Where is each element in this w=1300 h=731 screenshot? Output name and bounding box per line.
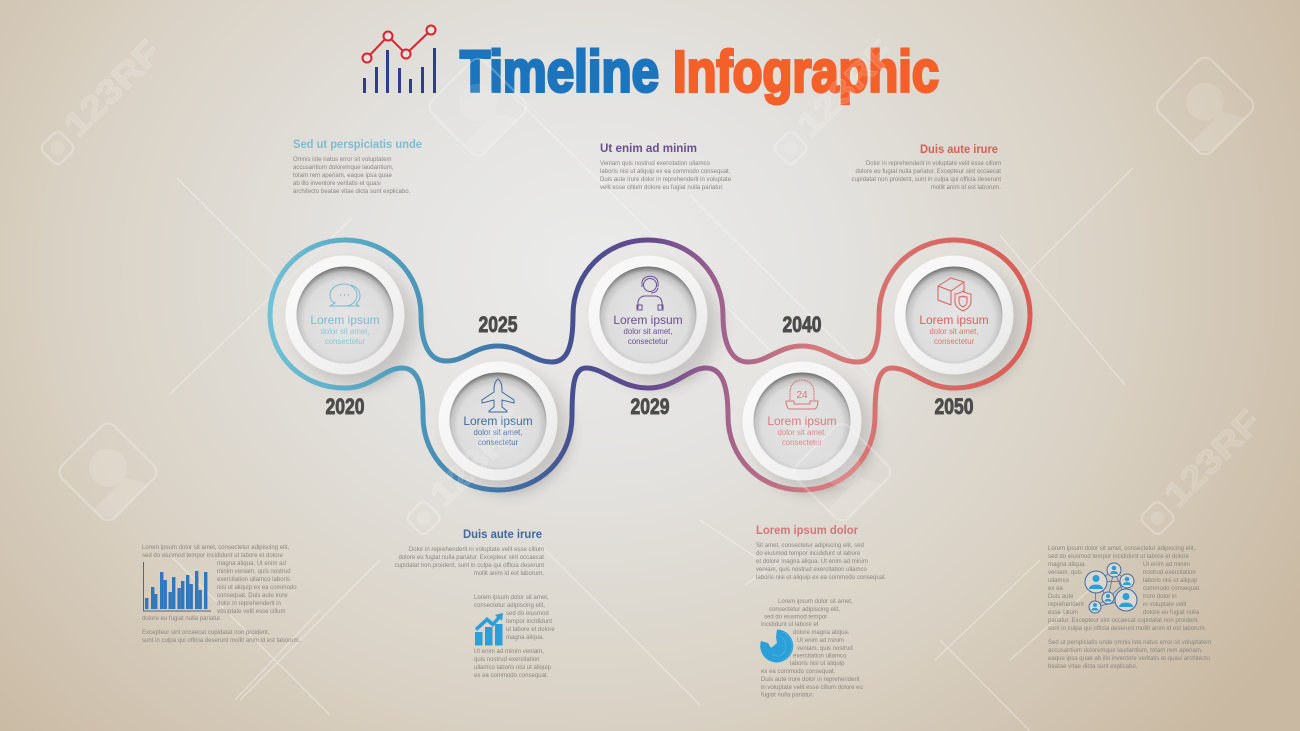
watermarks: 123RF xyxy=(790,33,902,145)
milestone 2025: dolor sit amet, xyxy=(474,428,522,437)
milestone 2025 xyxy=(438,362,558,480)
text block: bottom left: nisi ut aliquip ex ea commodo xyxy=(217,585,297,591)
text block: bottom left xyxy=(142,545,301,644)
text block: wrapped note: ex ea commodo consequat. xyxy=(761,669,836,675)
text block: bottom left: dolor in reprehenderit in xyxy=(217,601,281,607)
text block: bottom right: in voluptate velit xyxy=(1143,602,1187,608)
text block: growth note: quis nostrud exercitation xyxy=(474,657,540,663)
text block: Ut enim ad minim: velit esse cillum dolore eu fugiat nulla pariatur. xyxy=(600,185,724,191)
milestone 2040: consectetur xyxy=(782,438,823,447)
text block: bottom left: exercitation ullamco laboris xyxy=(217,577,290,583)
icon: airplane xyxy=(482,379,514,412)
milestone 2020: consectetur xyxy=(325,337,366,346)
icon: 24 hour phone xyxy=(786,380,818,409)
text block: bottom left: Lorem ipsum dolor sit amet, consectetur adipiscing elit, xyxy=(142,545,290,551)
milestone 2040: dolor sit amet, xyxy=(778,428,826,437)
text block: Ut enim ad minim: Veniam quis nostrud exercitation ullamco xyxy=(600,161,711,167)
milestone 2050: Lorem ipsum xyxy=(919,313,989,327)
milestone 2040: 24 xyxy=(796,390,808,401)
text block: Lorem ipsum dolor xyxy=(756,525,887,581)
text block: bottom left: sunt in culpa qui officia deserunt mollit anim id est laborum. xyxy=(142,638,301,644)
watermarks xyxy=(33,33,1269,539)
text block: bottom left: magna aliqua. Ut enim ad xyxy=(217,561,286,567)
text block: bottom right: sunt in culpa qui officia deserunt mollit anim id est laborum. xyxy=(1048,626,1207,632)
milestone 2029 xyxy=(588,256,708,374)
roadmap ribbon xyxy=(270,240,1030,490)
text block: Duis aute irure bottom: Dolor in reprehenderit in voluptate velit esse cillum xyxy=(409,547,544,553)
icon: bar chart xyxy=(144,562,211,611)
text block: Sed ut perspiciatis unde: Sed ut perspiciatis unde xyxy=(293,139,422,151)
text block: growth note: ut labore et dolore xyxy=(506,627,555,633)
text block: bottom right: nostrud exercitation xyxy=(1143,570,1196,576)
text block: growth note: ex ea commodo consequat. xyxy=(474,673,549,679)
background diagonal lines xyxy=(170,88,1133,731)
text block: growth note xyxy=(474,595,555,679)
milestone 2040: Lorem ipsum xyxy=(767,414,837,428)
text block: bottom right: accusantium doloremque laudantium, totam rem aperiam, xyxy=(1048,648,1203,654)
title icon: line and bar chart xyxy=(362,26,436,93)
text block: Sed ut perspiciatis unde: architecto beatae vitae dicta sunt explicabo. xyxy=(293,189,411,195)
text block: bottom right: veniam, quis xyxy=(1048,570,1082,576)
text block: Duis aute irure top: Duis aute irure xyxy=(920,144,998,156)
text block: wrapped note: Ut enim ad minim xyxy=(797,638,844,644)
text block: bottom right: Sed ut perspiciatis unde omnis iste natus error sit voluptatem xyxy=(1048,640,1211,646)
year labels: 2040 xyxy=(782,312,822,337)
text block: bottom right: esse cillum xyxy=(1048,610,1078,616)
text block: wrapped note: laboris nisi ut aliquip xyxy=(790,661,845,667)
milestone 2020: Lorem ipsum xyxy=(310,313,380,327)
milestone 2029: dolor sit amet, xyxy=(624,327,672,336)
text block: bottom right: irure dolor in xyxy=(1143,594,1177,600)
text block: growth note: consectetur adipiscing elit, xyxy=(474,603,545,609)
text block: bottom right: pariatur. Excepteur sint occaecat cupidatat non proident, xyxy=(1048,618,1199,624)
text block: wrapped note: exercitation ullamco xyxy=(793,654,847,660)
text block: Duis aute irure top: dolore eu fugiat nulla pariatur. Excepteur sint occaecat xyxy=(855,169,1001,175)
text block: bottom right: ullamco xyxy=(1048,578,1069,584)
text block: bottom left: dolore eu fugiat nulla pariatur. xyxy=(142,616,222,622)
milestone 2020 xyxy=(286,256,404,374)
text block: bottom right: dolore eu fugiat nulla xyxy=(1143,610,1200,616)
text block: wrapped note: Lorem ipsum dolor sit amet, xyxy=(778,599,853,605)
icon: box and shield xyxy=(938,278,971,311)
text block: Duis aute irure top: Dolor in reprehenderit in voluptate velit esse cillum xyxy=(866,161,1001,167)
title xyxy=(460,40,939,104)
text block: wrapped note: dolore magna aliqua. xyxy=(793,630,850,636)
text block: bottom left: minim veniam, quis nostrud xyxy=(217,569,291,575)
text block: growth note: magna aliqua. xyxy=(506,635,544,641)
watermarks: 123RF xyxy=(1157,403,1269,515)
text block: bottom right: Ut enim ad minim xyxy=(1143,562,1190,568)
text block: bottom right: beatae vitae dicta sunt explicabo. xyxy=(1048,664,1138,670)
text block: Ut enim ad minim: laboris nisi ut aliquip ex ea commodo consequat. xyxy=(600,169,731,175)
text block: bottom left: consequat. Duis aute irure xyxy=(217,593,288,599)
year labels: 2020 xyxy=(326,394,364,419)
text block: bottom right: Lorem ipsum dolor sit amet, consectetur adipiscing elit, xyxy=(1048,546,1196,552)
roadmap shadows xyxy=(295,265,1024,491)
milestone 2050 xyxy=(894,256,1014,374)
text block: bottom right: magna aliqua. xyxy=(1048,562,1086,568)
icon: growth chart xyxy=(475,613,503,646)
icon: radial donut chart xyxy=(760,630,793,662)
milestone 2050: consectetur xyxy=(934,337,975,346)
text block: wrapped note: fugiat nulla pariatur. xyxy=(761,692,814,698)
text block: Lorem ipsum dolor: do eiusmod tempor incididunt ut labore xyxy=(756,551,861,557)
text block: Lorem ipsum dolor: et dolore magna aliqua. Ut enim ad minim xyxy=(756,559,868,565)
text block: Sed ut perspiciatis unde xyxy=(293,139,422,195)
milestone 2050: dolor sit amet, xyxy=(930,327,978,336)
text block: bottom right: reprehenderit xyxy=(1048,602,1084,608)
text block: bottom right: Duis aute xyxy=(1048,594,1074,600)
text block: Lorem ipsum dolor: laboris nisi ut aliquip ex ea commodo consequat. xyxy=(756,575,887,581)
text block: Sed ut perspiciatis unde: totam rem aperiam, eaque ipsa quae xyxy=(293,173,392,179)
text block: Sed ut perspiciatis unde: Omnis iste natus error sit voluptatem xyxy=(293,157,391,163)
text block: Lorem ipsum dolor: Lorem ipsum dolor xyxy=(756,525,859,537)
milestone 2020: dolor sit amet, xyxy=(321,327,369,336)
year labels: 2025 xyxy=(478,312,518,337)
title: Timeline xyxy=(460,40,659,104)
text block: wrapped note: veniam, quis nostrud xyxy=(797,646,853,652)
milestone 2040 xyxy=(742,362,862,480)
text block: growth note: tempor incididunt xyxy=(506,619,552,625)
icon: chat bubbles xyxy=(330,284,360,306)
text block: Duis aute irure bottom: Duis aute irure xyxy=(463,529,542,541)
text block: Duis aute irure bottom: mollit anim id est laborum. xyxy=(474,571,544,577)
text block: growth note: sed do eiusmod xyxy=(506,611,549,617)
text block: wrapped note: incididunt ut labore et xyxy=(761,622,819,628)
text block: wrapped note xyxy=(761,599,863,698)
text block: wrapped note: in voluptate velit esse cillum dolore eu xyxy=(761,685,863,691)
text block: bottom right: commodo consequat. xyxy=(1143,586,1201,592)
text block: bottom right xyxy=(1048,546,1211,670)
text block: bottom left: Excepteur sint occaecat cupidatat non proident, xyxy=(142,630,270,636)
text block: Duis aute irure bottom: dolore eu fugiat nulla pariatur. Excepteur sint occaecat xyxy=(398,555,544,561)
text block: Duis aute irure bottom: cupidatat non proident, sunt in culpa qui officia deserunt xyxy=(395,563,544,569)
watermarks: 123RF xyxy=(423,403,535,515)
text block: bottom right: laboris nisi ut aliquip xyxy=(1143,578,1198,584)
watermarks: 123RF xyxy=(57,33,169,145)
text block: wrapped note: sed do eiusmod tempor xyxy=(764,614,827,620)
text block: Ut enim ad minim xyxy=(600,143,732,191)
text block: Lorem ipsum dolor: veniam, quis nostrud exercitation ullamco xyxy=(756,567,868,573)
text block: Ut enim ad minim: Ut enim ad minim xyxy=(600,143,697,155)
text block: bottom right: sed do eiusmod tempor incididunt ut labore et dolore xyxy=(1048,554,1189,560)
milestone 2025: consectetur xyxy=(478,438,519,447)
text block: bottom right: eaque ipsa quae ab illo inventore veritatis et quasi architecto xyxy=(1048,656,1211,662)
text block: Duis aute irure top: cupidatat non proident, sunt in culpa qui officia deserunt xyxy=(852,177,1001,183)
text block: Duis aute irure top: mollit anim id est laborum. xyxy=(931,185,1001,191)
text block: growth note: Ut enim ad minim veniam, xyxy=(474,649,544,655)
text block: Sed ut perspiciatis unde: ab illo inventore veritatis et quasi xyxy=(293,181,381,187)
text block: bottom right: ex ea xyxy=(1048,586,1063,592)
milestone 2029: Lorem ipsum xyxy=(613,313,683,327)
title: Infographic xyxy=(673,40,939,104)
text block: growth note: Lorem ipsum dolor sit amet, xyxy=(474,595,549,601)
year labels: 2029 xyxy=(630,394,670,419)
year labels: 2050 xyxy=(934,394,974,419)
text block: Duis aute irure top xyxy=(852,144,1001,191)
milestone 2029: consectetur xyxy=(628,337,669,346)
text block: growth note: ullamco laboris nisi ut aliquip xyxy=(474,665,552,671)
text block: bottom left: voluptate velit esse cillum xyxy=(217,609,286,615)
text block: bottom left: sed do eiusmod tempor incididunt ut labore et dolore xyxy=(142,553,283,559)
milestone 2025: Lorem ipsum xyxy=(463,414,533,428)
icon: people network xyxy=(1085,563,1137,613)
text block: wrapped note: consectetur adipiscing elit, xyxy=(769,607,840,613)
text block: Duis aute irure bottom xyxy=(395,529,544,577)
text block: Ut enim ad minim: Duis aute irure dolor in reprehenderit in voluptate xyxy=(600,177,732,183)
text block: Lorem ipsum dolor: Sit amet, consectetur adipiscing elit, sed xyxy=(756,543,864,549)
text block: Sed ut perspiciatis unde: accusantium doloremque laudantium, xyxy=(293,165,394,171)
year labels xyxy=(326,312,974,419)
text block: wrapped note: Duis aute irure dolor in reprehenderit xyxy=(761,677,860,683)
icon: headset operator xyxy=(637,276,663,310)
